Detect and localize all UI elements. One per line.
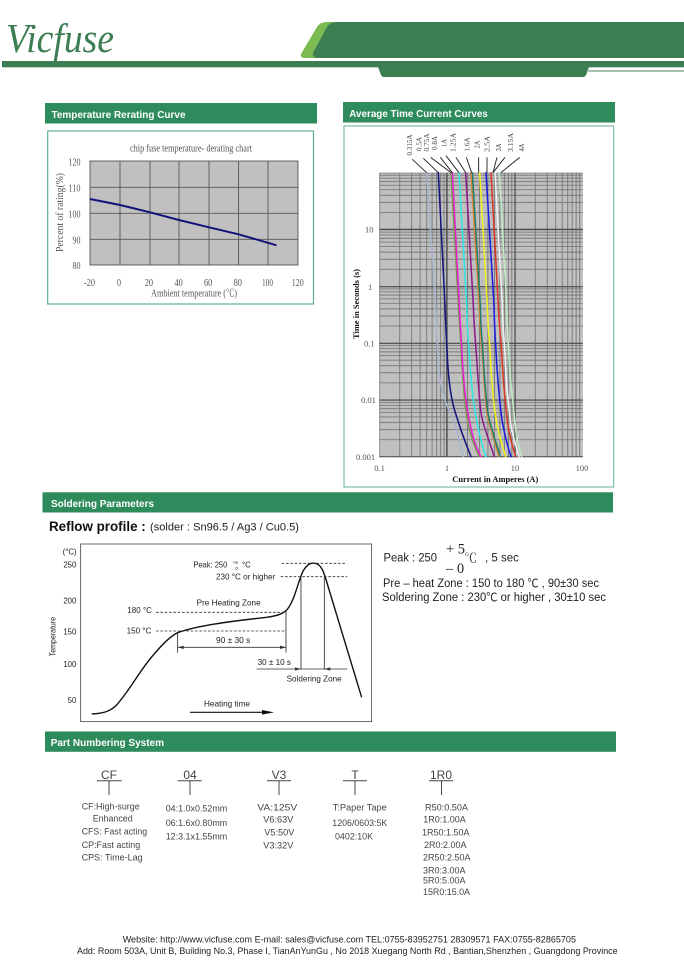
heading: Average Time Current Curves: Average Time Current Curves [349, 109, 488, 120]
chart annotations: Heating time [204, 700, 250, 709]
curve rating labels: 1.6A [462, 137, 472, 152]
chart annotations: 30 ± 10 s [258, 658, 291, 667]
part number column: size: 12:3.1x1.55mm [166, 831, 227, 842]
part number column: packaging: 0402:10K [335, 831, 374, 842]
y axis labels: 0.01 [361, 395, 376, 405]
logo: Vicfuse: Vicfuse [6, 15, 114, 61]
y axis labels: 120 [68, 157, 81, 169]
reflow parameters text: Soldering Zone : 230℃ or higher , 30±10 sec [382, 592, 606, 604]
reflow parameters text: , 5 sec [485, 553, 519, 565]
axis labels: 250 [63, 561, 77, 570]
y axis labels: 90 [72, 234, 81, 246]
x axis labels: 80 [234, 277, 242, 289]
part number column: current: 2R50:2.50A [423, 853, 471, 864]
heading: Soldering Parameters: Soldering Parameters [51, 499, 154, 510]
part number column: voltage: V5:50V [264, 827, 295, 838]
duration arrows [178, 646, 347, 671]
part number column: CF: CF:High-surge [82, 801, 140, 812]
y axis labels: 100 [68, 208, 81, 220]
reflow parameters text: + 5 [446, 542, 465, 558]
x axis labels: 0.1 [374, 463, 385, 473]
part number column: voltage: V3 [272, 768, 287, 782]
x axis labels: 0 [117, 277, 121, 289]
panel: temperature derating chart [48, 131, 313, 304]
chart annotations: Pre Heating Zone [197, 599, 261, 608]
chart annotations: 180 °C [127, 606, 152, 615]
axis labels: 100 [63, 660, 77, 669]
x axis labels: 40 [174, 277, 183, 289]
part number column: current: 1R50:1.50A [422, 827, 470, 838]
part number column: current [422, 768, 471, 898]
y axis labels: 0.001 [356, 452, 375, 462]
curve 0.315A [427, 173, 463, 457]
footer contact details: Add: Room 503A, Unit B, Building No.3, Phase I, TianAnYunGu , No 2018 Xuegang North Rd , Bantian,Shenzhen , Guangdong Province [77, 946, 618, 957]
fuse curves [427, 173, 522, 457]
part number column: CF: CPS: Time-Lag [82, 852, 143, 864]
part number column: packaging: 1206/0603:5K [332, 818, 388, 829]
chart annotations: 0 [235, 566, 238, 571]
part number column: current: 2R0:2.00A [424, 840, 467, 851]
curve 1A [459, 173, 486, 457]
part number column: packaging: T [351, 768, 359, 782]
heading: Temperature Rerating Curve: Temperature Rerating Curve [52, 110, 186, 121]
x axis title: Current in Amperes (A) [452, 475, 539, 484]
curve pale white [495, 173, 519, 457]
panel: average time current curves [344, 126, 614, 487]
reflow parameters text: ℃ [464, 550, 477, 566]
part number column: current: 5R0:5.00A [423, 875, 466, 886]
x axis title: Ambient temperature (℃) [151, 288, 237, 300]
header banner [2, 15, 684, 77]
part number column: CF [82, 768, 147, 864]
curve rating labels: 1.25A [448, 132, 458, 152]
part number column: packaging: T:Paper Tape [333, 803, 387, 814]
footer contact details [77, 934, 618, 957]
chart annotations: Soldering Zone [287, 675, 342, 684]
curve rating labels: 0.315A [405, 134, 414, 156]
y axis labels: 10 [365, 224, 374, 234]
chart frame [81, 544, 372, 722]
heading: Soldering Parameters [42, 492, 613, 512]
panel: reflow temperature chart [48, 544, 372, 722]
reflow parameters text: Pre – heat Zone : 150 to 180 ℃ , 90±30 sec [383, 578, 599, 590]
x axis labels: 1 [445, 463, 449, 473]
x axis labels: 20 [145, 277, 153, 289]
part number column: voltage: VA:125V [257, 803, 298, 814]
axis labels: 150 [63, 628, 77, 637]
axis labels: (°C) [63, 547, 77, 556]
footer contact details: Website: http://www.vicfuse.com E-mail: sales@vicfuse.com TEL:0755-83952751 28309571 FAX:0755-82865705 [123, 934, 576, 946]
y axis title: Time in Seconds (s) [352, 269, 361, 339]
part number column: size: 04 [183, 768, 197, 782]
part number column: current: 1R0 [430, 768, 452, 782]
axis labels [63, 547, 77, 705]
header rule [2, 61, 684, 67]
x axis labels [84, 277, 304, 289]
part number column: current: 3R0:3.00A [423, 865, 466, 876]
chart annotations: Peak: 250 [193, 561, 228, 570]
chart title: chip fuse temperature- derating chart [130, 144, 252, 155]
curve rating labels: 0.75A [422, 133, 431, 152]
curve rating labels: 3A [494, 143, 503, 152]
part number column: CF: CFS: Fast acting [82, 827, 147, 838]
curve rating labels: 3.15A [506, 132, 515, 152]
part number column: CF: CP:Fast acting [82, 840, 140, 851]
curve rating labels: 4A [517, 143, 526, 152]
derating line [90, 199, 276, 245]
curve 0.75A [451, 173, 479, 457]
reflow profile title: Reflow profile : [49, 518, 146, 534]
part number column: voltage: V6:63V [263, 814, 294, 825]
chart annotations: 90 ± 30 s [216, 636, 250, 645]
y axis labels: 1 [368, 282, 372, 292]
reflow curve [92, 563, 362, 714]
x axis labels: 10 [511, 463, 519, 473]
y axis title: Temperature [48, 617, 57, 656]
x axis labels: -20 [84, 277, 95, 289]
x axis labels: 100 [262, 277, 273, 289]
x axis labels [374, 463, 588, 473]
chart annotations: °C [242, 561, 251, 570]
reflow profile title: (solder : Sn96.5 / Ag3 / Cu0.5) [150, 522, 299, 534]
chart annotations [127, 560, 342, 709]
curve 1.6A [471, 173, 499, 457]
part number column: packaging [332, 768, 388, 842]
heating time arrow [190, 710, 274, 715]
part number column: CF: CF [101, 768, 117, 782]
curve rating labels: 0.5A [414, 136, 424, 151]
curve 3A [486, 173, 511, 457]
part number column: voltage [257, 768, 298, 852]
reflow parameters text: Peak : 250 [384, 553, 437, 565]
reflow profile title [49, 518, 299, 534]
part number column: size [166, 768, 227, 842]
heading: Temperature Rerating Curve [45, 103, 317, 124]
x axis labels: 100 [576, 463, 588, 473]
curve rating labels [405, 132, 526, 156]
curve 4A [499, 173, 522, 457]
thin grey rule [588, 70, 684, 72]
reflow parameters text: – 0 [445, 561, 464, 577]
heading: Average Time Current Curves [343, 102, 615, 122]
y axis labels [356, 224, 376, 462]
curve 0.5A [438, 173, 471, 457]
light green banner accent [301, 22, 345, 58]
plot area [90, 161, 298, 265]
curve 2.5A [480, 173, 506, 457]
x axis labels: 120 [292, 277, 304, 289]
log plot background and grid [379, 173, 583, 457]
curve 3.15A [491, 173, 516, 457]
part number column: CF: Enhanced [93, 814, 133, 825]
curve rating labels: 2A [472, 140, 482, 148]
chart annotations: 230 °C or higher [216, 572, 276, 581]
guide lines [156, 563, 347, 631]
dark green banner [313, 22, 684, 58]
curve rating labels: 0.8A [430, 135, 439, 150]
y axis labels: 110 [68, 183, 81, 195]
part number column: voltage: V3:32V [263, 841, 294, 852]
y axis title: Percent of rating(%) [55, 173, 66, 252]
part number column: current: R50:0.50A [425, 803, 469, 814]
curve rating labels: 1A [440, 138, 448, 147]
y axis labels: 80 [72, 260, 81, 272]
part number column: size: 06:1.6x0.80mm [166, 818, 227, 829]
heading: Part Numbering System: Part Numbering System [51, 738, 164, 749]
part number column: size: 04:1.0x0.52mm [166, 804, 227, 815]
y axis labels [68, 157, 81, 272]
part number column: current: 15R0:15.0A [423, 887, 471, 898]
chart annotations: 150 °C [127, 627, 152, 636]
axis labels: 200 [63, 597, 77, 606]
curve 0.8A [452, 173, 481, 457]
curve 2A [472, 173, 500, 457]
reflow parameters text [382, 542, 606, 604]
part number column: current: 1R0:1.00A [423, 814, 466, 825]
curve 1.25A [466, 173, 494, 457]
heading: Part Numbering System [45, 732, 616, 752]
x axis labels: 60 [204, 277, 213, 289]
axis labels: 50 [68, 696, 77, 705]
y axis labels: 0.1 [364, 338, 375, 348]
curve leader lines [412, 156, 520, 173]
header tab [378, 67, 589, 77]
curve rating labels: 2.5A [482, 135, 492, 152]
chart annotations: +5 [233, 560, 238, 565]
